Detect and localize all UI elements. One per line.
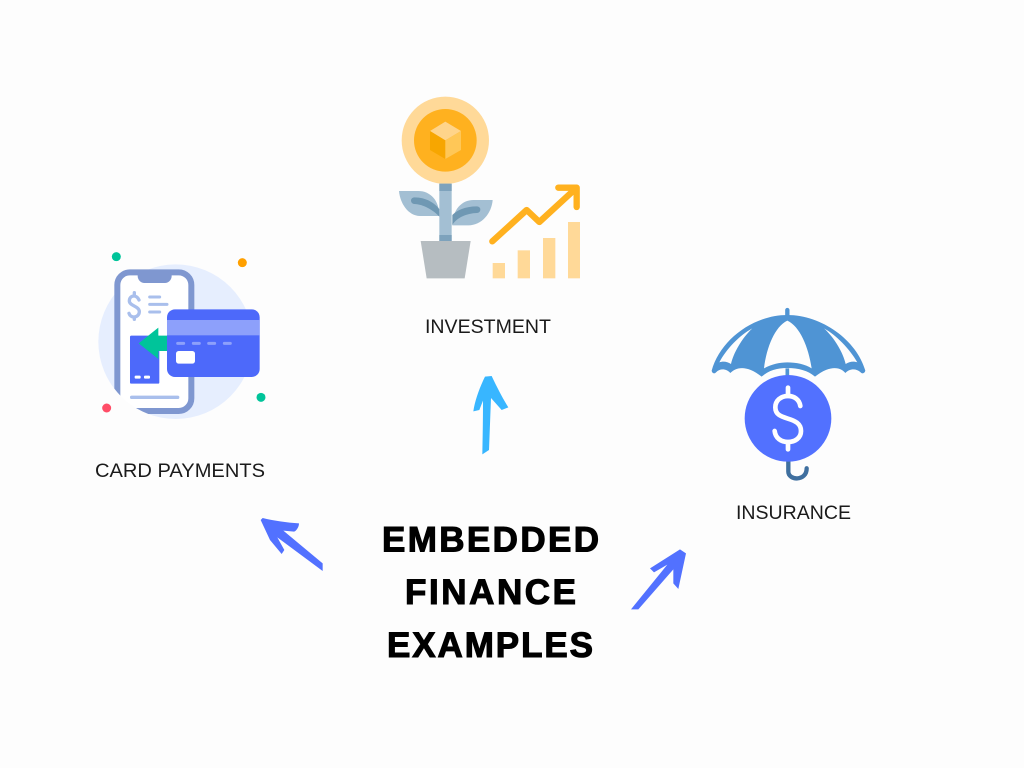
icon: rising arrow	[492, 188, 577, 241]
icon: pot	[421, 241, 471, 278]
label: investment: INVESTMENT	[425, 316, 551, 338]
icon: green arrow	[139, 328, 172, 359]
icon: phone	[112, 272, 191, 418]
icon: investment plant with chart	[399, 97, 580, 278]
icon: card payments	[98, 252, 265, 419]
arrow: to insurance	[631, 549, 686, 609]
icon: stem and leaves	[399, 184, 493, 241]
icon: dollar coin	[745, 375, 831, 462]
icon: umbrella canopy	[712, 310, 865, 377]
arrow: to investment	[473, 376, 508, 454]
label: card payments: CARD PAYMENTS	[95, 460, 265, 482]
icon: coin flower	[402, 97, 489, 184]
arrow: to card payments	[261, 518, 323, 571]
icon: background circle	[98, 264, 253, 419]
arrows	[261, 376, 686, 609]
title: EMBEDDED	[382, 520, 599, 559]
title: FINANCE	[405, 573, 576, 612]
title	[382, 520, 599, 665]
title: EXAMPLES	[387, 626, 593, 665]
icon: insurance umbrella	[712, 310, 865, 478]
icon: credit card	[167, 309, 260, 377]
bar chart	[493, 222, 580, 278]
icon: umbrella handle	[788, 462, 807, 478]
icon: confetti dots	[102, 252, 265, 412]
label: insurance: INSURANCE	[736, 502, 851, 524]
